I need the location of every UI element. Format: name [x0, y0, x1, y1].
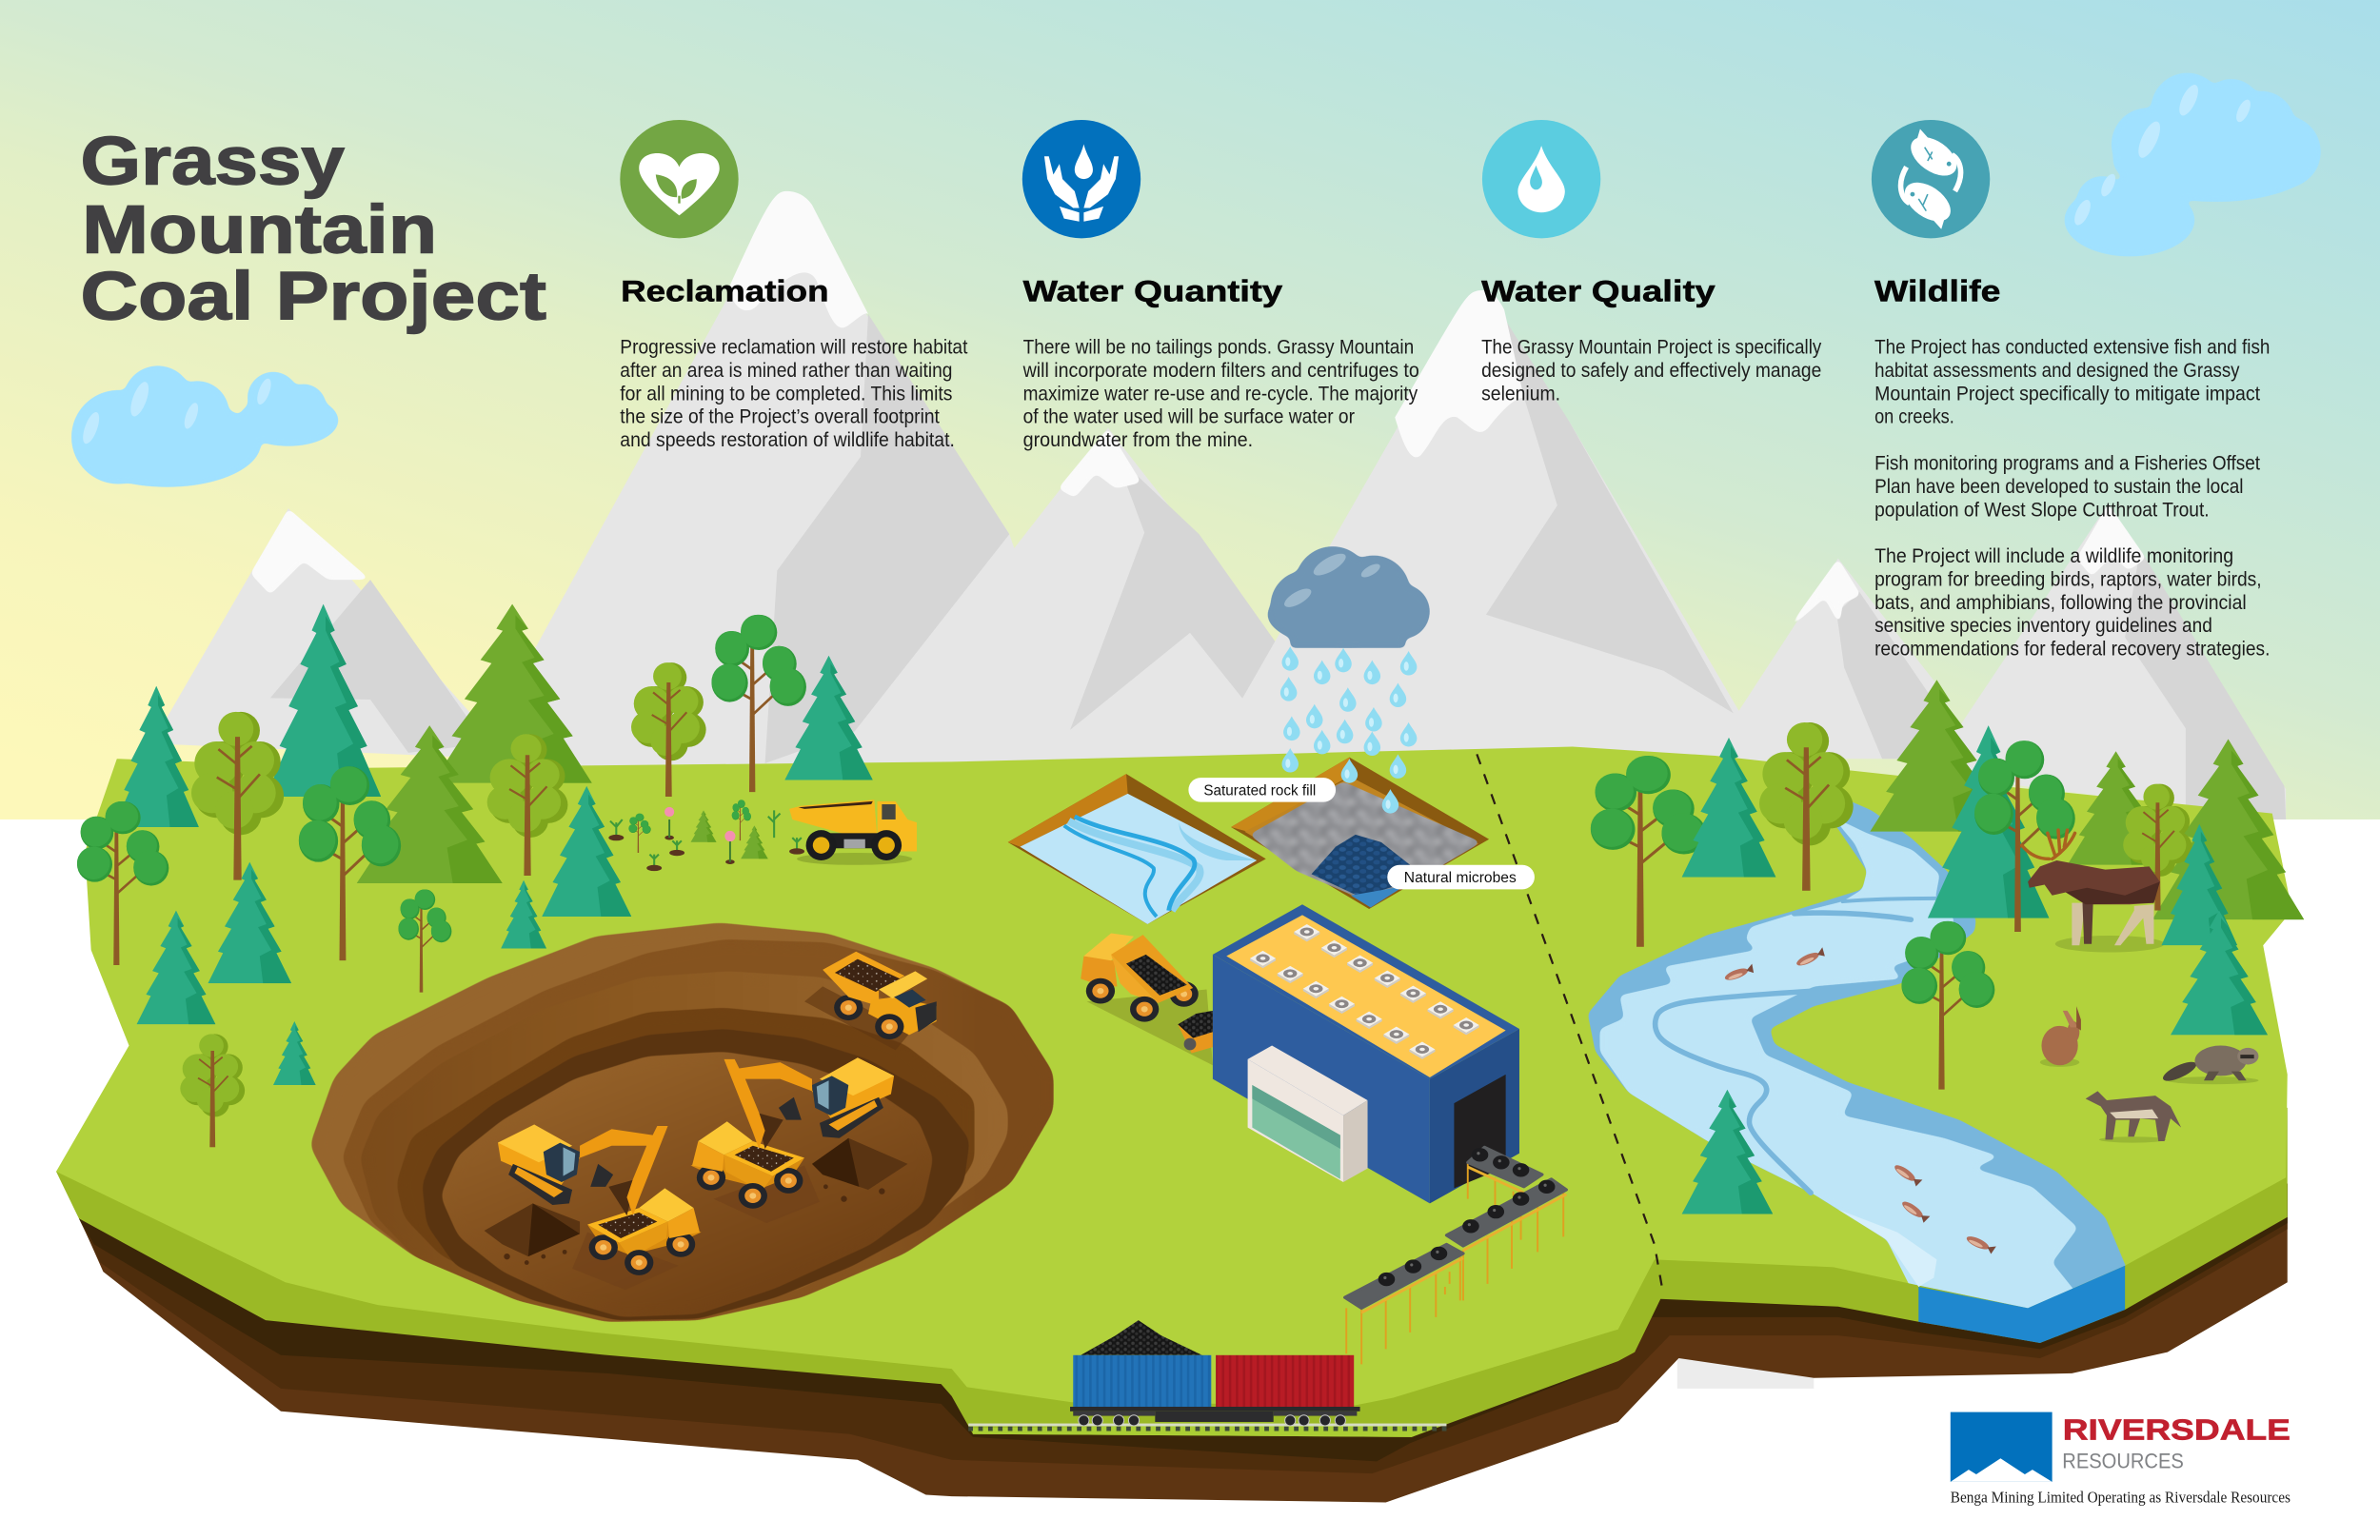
mountain: centre — [850, 428, 1277, 759]
river: deeper water edges — [1588, 800, 2132, 1328]
title — [81, 124, 546, 335]
cloud: right — [2064, 73, 2321, 256]
train: blue container — [1073, 1355, 1211, 1407]
faint shadow under island — [1677, 1355, 1814, 1389]
panel: wildlife — [1872, 120, 2270, 661]
building: roof — [1226, 915, 1506, 1077]
text block: of the water used will be surface water or — [1023, 405, 1355, 428]
text block: fish monitoring — [1874, 451, 2260, 521]
text block: Progressive reclamation will restore habitat — [620, 335, 967, 358]
island side: dark green lip — [56, 1093, 2288, 1437]
title: Coal Project — [81, 259, 546, 335]
callout: saturated rock fill: Saturated rock fill — [1203, 782, 1316, 799]
rock fill bioreactor — [1231, 758, 1489, 909]
truck in pit: upper right — [804, 952, 937, 1050]
bright grass below railway — [973, 1424, 1446, 1437]
open pit mine — [309, 922, 1054, 1322]
island base: soil layers — [79, 1184, 2288, 1502]
building: right wall — [1430, 1029, 1519, 1203]
conveyor: middle segment — [1446, 1179, 1566, 1251]
excavator in pit: right — [724, 1057, 894, 1149]
text block — [1022, 335, 1419, 451]
heading: Reclamation — [621, 274, 829, 307]
building: entrance — [1248, 1046, 1368, 1182]
panel: water quality — [1481, 120, 1821, 405]
logo: Riversdale Resources — [1951, 1412, 2291, 1506]
conveyor: lower segment — [1345, 1244, 1463, 1313]
tall conifer right edge — [2161, 824, 2268, 1035]
icon: water drop — [1482, 120, 1600, 238]
train: coal pile — [1081, 1320, 1202, 1355]
title: Mountain — [82, 191, 437, 267]
truck in pit: centre — [690, 1121, 820, 1223]
river: water surfaces clipped to island top — [1588, 800, 2132, 1328]
river: pale bank wedge — [1838, 1210, 1936, 1287]
river: current strips — [1656, 898, 1935, 1193]
text block: fish monitoring: Plan have been developed to sustain the local — [1874, 475, 2244, 498]
processing plant building — [1213, 904, 1519, 1203]
text block: assessments — [1874, 335, 2270, 428]
callout: natural microbes — [1387, 865, 1535, 889]
text block: There will be no tailings ponds. Grassy Mountain — [1023, 335, 1414, 358]
railway track — [968, 1424, 1446, 1429]
text block: fish monitoring: population of West Slope Cutthroat Trout. — [1874, 498, 2210, 521]
island top: grass — [56, 746, 2292, 1405]
building: rooftop vents — [1250, 924, 1479, 1059]
cloud: left — [71, 365, 339, 487]
building: left wall — [1213, 955, 1430, 1203]
pit: soil pile right — [812, 1138, 907, 1202]
mountain: large centre-left — [501, 191, 1093, 774]
pit: lower terrace — [396, 1008, 975, 1320]
pit: outer rim — [309, 922, 1054, 1322]
mountain: far right — [1928, 503, 2286, 819]
text block: selenium. — [1481, 382, 1560, 405]
icon: hands holding drop — [1022, 120, 1140, 238]
text block: wildlife monitoring: The Project will include a wildlife monitoring — [1874, 544, 2233, 567]
text block: wildlife monitoring — [1874, 544, 2270, 661]
fish group in river — [1723, 947, 1996, 1254]
text block: the size of the Project’s overall footprint — [620, 405, 940, 428]
heading: Wildlife — [1874, 274, 2000, 307]
text block: for all mining to be completed. This limits — [620, 382, 952, 405]
moose — [2022, 830, 2165, 952]
text block: assessments: The Project has conducted extensive fish and fish — [1874, 335, 2270, 358]
pit: soil pile left — [485, 1203, 580, 1265]
rain drops — [1280, 646, 1417, 814]
pit: middle terrace — [360, 971, 1008, 1320]
truck in pit: lower — [572, 1188, 702, 1290]
pit: upper terrace — [342, 939, 1054, 1322]
logo mark — [1951, 1412, 2053, 1482]
train: chassis and wheels — [1070, 1407, 1360, 1426]
icon: heart with leaves — [620, 120, 739, 238]
heading: Water Quantity — [1023, 274, 1283, 307]
text block: maximize water re-use and re-cycle. The majority — [1023, 382, 1418, 405]
building: door — [1454, 1075, 1506, 1188]
text block: The Grassy Mountain Project is specifically — [1481, 335, 1821, 358]
text block: designed to safely and effectively manage — [1481, 359, 1821, 382]
text block: wildlife monitoring: recommendations for federal recovery strategies. — [1874, 638, 2270, 661]
text block: assessments: on creeks. — [1874, 405, 1954, 428]
text block: fish monitoring: Fish monitoring programs and a Fisheries Offset — [1874, 451, 2260, 474]
dashed boundary line — [1477, 754, 1663, 1296]
text block: assessments: Mountain Project specifically to mitigate impact — [1874, 382, 2260, 405]
conveyor belts — [1345, 1147, 1566, 1364]
logo subtitle: RESOURCES — [2062, 1450, 2184, 1473]
seedlings and flowers — [608, 800, 804, 871]
heading: Water Quality — [1481, 274, 1716, 307]
tree over river — [1901, 921, 1994, 1090]
mountain: far left — [151, 508, 501, 759]
title: Grassy — [81, 124, 345, 200]
river: shallow water — [1599, 817, 2078, 1317]
text block: wildlife monitoring: program for breeding birds, raptors, water birds, — [1874, 567, 2262, 590]
callout: saturated rock fill — [1188, 778, 1336, 802]
trees: centre right — [1591, 722, 1854, 1214]
mountain: small right — [1708, 559, 1973, 759]
raccoon — [2161, 1046, 2258, 1085]
text block — [1481, 335, 1821, 405]
icon: two fish — [1872, 120, 1990, 238]
text block: groundwater from the mine. — [1023, 428, 1253, 451]
trees: right forest — [1870, 680, 2304, 932]
panel: reclamation — [620, 120, 967, 451]
logo wordmark: RIVERSDALE — [2063, 1415, 2291, 1447]
pit: floor — [440, 1052, 934, 1317]
background sky gradient — [0, 0, 2380, 819]
coal train — [1070, 1320, 1360, 1426]
settling pond — [1008, 774, 1266, 924]
haul truck: reclamation — [789, 800, 917, 865]
pit: inner dark ring — [422, 1029, 970, 1320]
text block: and speeds restoration of wildlife habitat. — [620, 428, 955, 451]
river: front cut face — [1918, 1266, 2125, 1343]
river — [1588, 800, 2132, 1343]
wolf — [2086, 1091, 2181, 1143]
text block: wildlife monitoring: bats, and amphibians, following the provincial — [1874, 591, 2247, 614]
mountain range — [151, 191, 2286, 819]
trees: left forest — [77, 604, 631, 1147]
logo tagline: Benga Mining Limited Operating as Riversdale Resources — [1951, 1488, 2291, 1506]
train: red container — [1216, 1355, 1354, 1407]
text block: will incorporate modern filters and centrifuges to — [1022, 359, 1419, 382]
text block — [620, 335, 967, 451]
text block: assessments: habitat assessments and designed the Grassy — [1874, 359, 2240, 382]
trees: reclamation area — [631, 615, 873, 797]
callout: natural microbes: Natural microbes — [1404, 870, 1517, 886]
building: roof frame — [1213, 904, 1519, 1079]
excavator in pit: left — [498, 1124, 668, 1215]
text block: after an area is mined rather than waiting — [620, 359, 952, 382]
panel: water quantity — [1022, 120, 1419, 451]
mountain: large right — [1200, 290, 1775, 774]
rain cloud — [1267, 546, 1430, 648]
conveyor: upper segment — [1468, 1147, 1542, 1193]
coal truck and cart — [1081, 934, 1213, 1065]
rabbit — [2040, 1006, 2081, 1067]
text block: wildlife monitoring: sensitive species inventory guidelines and — [1874, 614, 2212, 637]
